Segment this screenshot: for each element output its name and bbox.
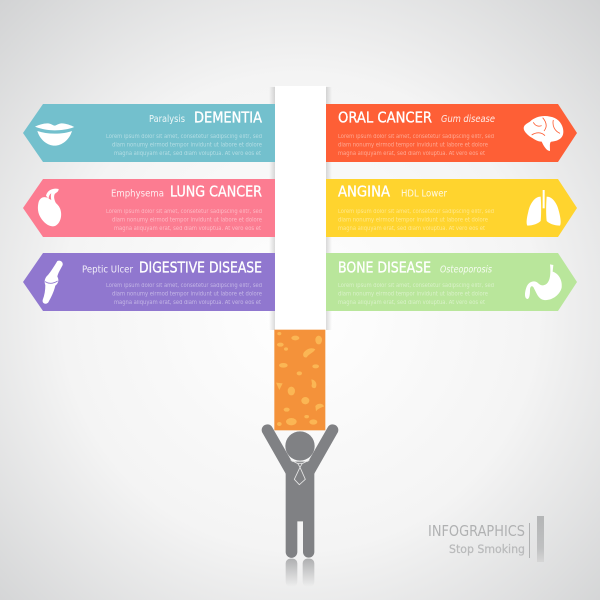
body text: angina: diam nonumy eirmod tempor invidunt ut labore et dolore xyxy=(338,218,488,224)
icon: heart xyxy=(38,189,61,226)
icon: brain xyxy=(524,116,563,151)
heading: lung cancer: LUNG CANCER xyxy=(170,182,262,200)
body text: lung cancer: Lorem ipsum dolor sit amet, consetetur sadipscing elitr, sed xyxy=(106,209,262,215)
heading: angina: ANGINA xyxy=(338,182,391,200)
body text: lung cancer xyxy=(106,209,262,232)
label: gum disease: Gum disease xyxy=(441,114,495,125)
cigarette paper xyxy=(275,86,326,330)
body text: angina: Lorem ipsum dolor sit amet, consetetur sadipscing elitr, sed xyxy=(338,209,494,215)
caption subtitle: Stop Smoking xyxy=(449,542,525,556)
exclamation mark xyxy=(529,516,544,562)
icon: stomach xyxy=(525,264,562,300)
banner shape: purple arrow xyxy=(23,253,275,311)
body text: lung cancer: magna aliquyam erat, sed diam voluptua. At vero eos et xyxy=(114,226,262,232)
label: hdl lower: HDL Lower xyxy=(401,188,448,200)
footer caption xyxy=(428,516,544,562)
heading: bone disease: BONE DISEASE xyxy=(338,258,431,276)
body text: oral cancer: diam nonumy eirmod tempor invidunt ut labore et dolore xyxy=(338,142,488,148)
label: emphysema: Emphysema xyxy=(111,188,164,200)
body text: bone disease: diam nonumy eirmod tempor invidunt ut labore et dolore xyxy=(338,292,488,298)
figure: businessman holding cigarette xyxy=(267,430,333,587)
label: peptic ulcer: Peptic Ulcer xyxy=(82,264,134,276)
body text: digestive disease: diam nonumy eirmod tempor invidunt ut labore et dolore xyxy=(112,292,262,298)
body text: bone disease: magna aliquyam erat, sed diam voluptua. At vero eos et xyxy=(338,300,486,306)
body text: dementia: magna aliquyam erat, sed diam voluptua. At vero eos et xyxy=(114,151,262,157)
head xyxy=(285,431,315,461)
icon: lips xyxy=(35,123,74,146)
heading: oral cancer: ORAL CANCER xyxy=(338,108,432,126)
panel: bone disease xyxy=(326,253,577,311)
cigarette shadow xyxy=(269,87,332,330)
body text: oral cancer xyxy=(338,134,494,157)
panel: dementia xyxy=(23,104,275,162)
body text: angina: magna aliquyam erat, sed diam voluptua. At vero eos et xyxy=(338,226,486,232)
icon: knee joint xyxy=(43,261,63,304)
banner shape: yellow arrow xyxy=(326,179,577,237)
body text: oral cancer: magna aliquyam erat, sed diam voluptua. At vero eos et xyxy=(338,151,486,157)
body text: bone disease xyxy=(338,283,494,306)
body text: lung cancer: diam nonumy eirmod tempor invidunt ut labore et dolore xyxy=(112,218,262,224)
body text: digestive disease xyxy=(106,283,262,306)
tie xyxy=(291,460,309,485)
caption title: INFOGRAPHICS xyxy=(428,522,525,540)
cigarette filter xyxy=(274,330,325,430)
banner shape: pink arrow xyxy=(23,179,275,237)
body text: angina xyxy=(338,209,494,232)
arms xyxy=(267,430,333,473)
icon: lungs xyxy=(527,190,561,226)
label: osteoporosis: Osteoporosis xyxy=(440,264,492,276)
body text: dementia: Lorem ipsum dolor sit amet, consetetur sadipscing elitr, sed xyxy=(106,134,262,140)
banner shape: orange arrow xyxy=(326,104,577,162)
torso and legs xyxy=(286,462,314,558)
panel: lung cancer xyxy=(23,179,275,237)
label: paralysis: Paralysis xyxy=(149,114,185,125)
heading: dementia: DEMENTIA xyxy=(194,108,263,126)
heading: digestive disease: DIGESTIVE DISEASE xyxy=(139,258,262,276)
body text: digestive disease: Lorem ipsum dolor sit amet, consetetur sadipscing elitr, sed xyxy=(106,283,262,289)
panel: oral cancer xyxy=(326,104,577,162)
body text: digestive disease: magna aliquyam erat, sed diam voluptua. At vero eos et xyxy=(114,300,262,306)
body text: oral cancer: Lorem ipsum dolor sit amet, consetetur sadipscing elitr, sed xyxy=(338,134,494,140)
body text: dementia xyxy=(106,134,262,157)
figure reflection xyxy=(286,559,314,587)
panel: angina xyxy=(326,179,577,237)
body text: bone disease: Lorem ipsum dolor sit amet, consetetur sadipscing elitr, sed xyxy=(338,283,494,289)
banner shape: green arrow xyxy=(326,253,577,311)
body text: dementia: diam nonumy eirmod tempor invidunt ut labore et dolore xyxy=(112,142,262,148)
panel: digestive disease xyxy=(23,253,275,311)
banner shape: teal arrow xyxy=(23,104,275,162)
